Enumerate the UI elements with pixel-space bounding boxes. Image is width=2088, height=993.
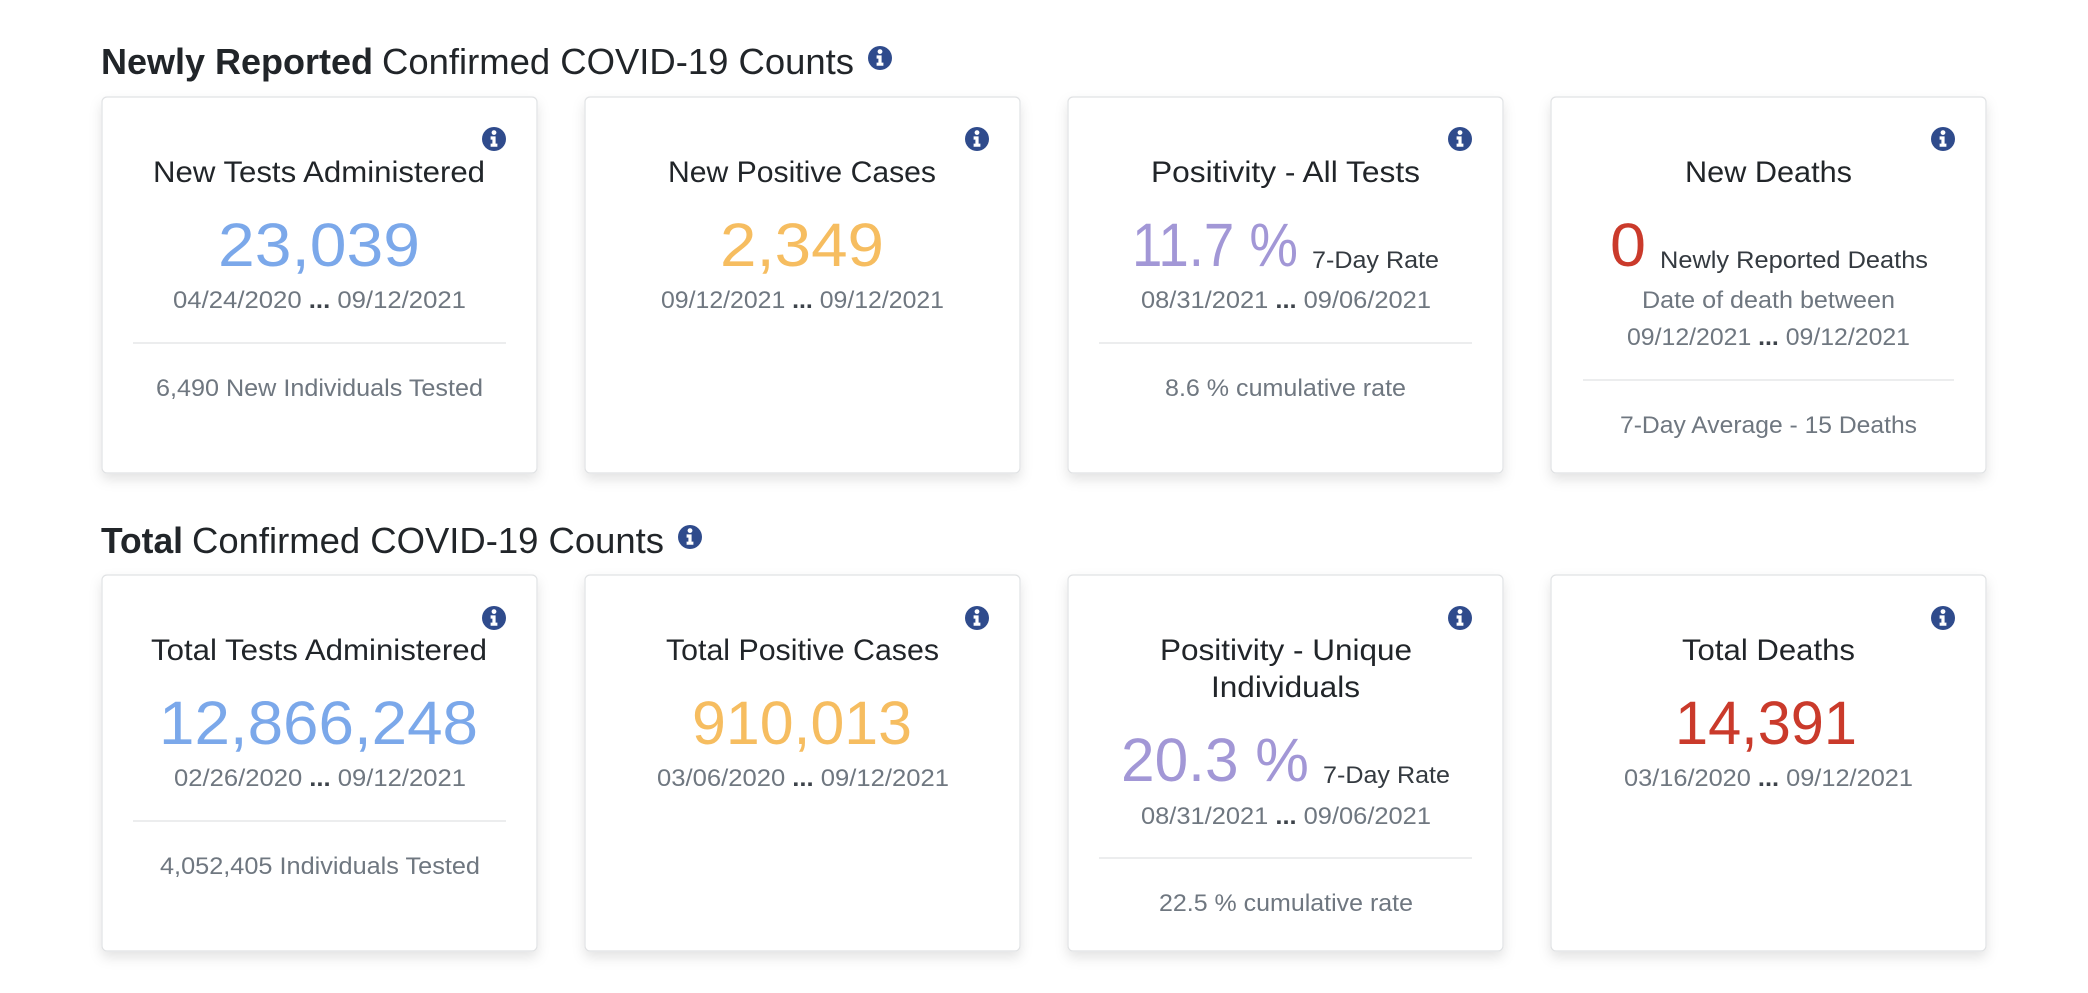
panel: positivity unique individuals: [1068, 575, 1503, 951]
rate label: 7-Day Rate: [1323, 762, 1450, 789]
footnote: 22.5 % cumulative rate: [1159, 890, 1413, 917]
card title: Positivity - All Tests: [1151, 156, 1420, 189]
icon: heading info: [868, 46, 892, 70]
icon: info: [1448, 127, 1472, 151]
panel: new positive cases: [585, 97, 1020, 473]
panel: new deaths: [1551, 97, 1986, 473]
date range: 08/31/2021 ... 09/06/2021: [1141, 803, 1431, 830]
date range: 02/26/2020 ... 09/12/2021: [174, 765, 466, 792]
card title: New Deaths: [1685, 156, 1852, 189]
panel: positivity all tests: [1068, 97, 1503, 473]
value: 0: [1610, 211, 1646, 279]
date range: 03/16/2020 ... 09/12/2021: [1624, 765, 1913, 792]
icon: info: [1931, 606, 1955, 630]
deaths label: Newly Reported Deaths: [1660, 247, 1928, 274]
heading: newly reported: Newly Reported: [101, 41, 373, 82]
card title: New Tests Administered: [153, 156, 485, 189]
footnote: 7-Day Average - 15 Deaths: [1620, 412, 1917, 439]
rate label: 7-Day Rate: [1312, 247, 1439, 274]
icon: info: [1448, 606, 1472, 630]
icon: info: [482, 606, 506, 630]
card title: [1160, 634, 1412, 704]
icon: info: [965, 606, 989, 630]
panel: total positive cases: [585, 575, 1020, 951]
panel: total deaths: [1551, 575, 1986, 951]
card title: Total Deaths: [1682, 634, 1855, 667]
card title: Positivity - Unique: [1160, 634, 1412, 667]
value: 14,391: [1675, 689, 1857, 757]
value: 910,013: [692, 689, 912, 757]
date range: 08/31/2021 ... 09/06/2021: [1141, 287, 1431, 314]
value: 23,039: [218, 211, 420, 279]
footnote: 6,490 New Individuals Tested: [156, 375, 483, 402]
heading: total: Confirmed COVID-19 Counts: [192, 520, 664, 561]
card title: New Positive Cases: [668, 156, 936, 189]
panel: total tests administered: [102, 575, 537, 951]
date note: Date of death between: [1642, 287, 1895, 314]
heading: total: Total: [101, 520, 183, 561]
value: 20.3 %: [1121, 726, 1309, 794]
icon: info: [965, 127, 989, 151]
heading: newly reported: [101, 41, 854, 82]
date range: 09/12/2021 ... 09/12/2021: [1627, 324, 1910, 351]
card title: Individuals: [1211, 671, 1360, 704]
value: 2,349: [720, 211, 884, 279]
date range: 09/12/2021 ... 09/12/2021: [661, 287, 944, 314]
card title: Total Positive Cases: [666, 634, 939, 667]
value: 11.7 %: [1132, 211, 1298, 279]
date range: 04/24/2020 ... 09/12/2021: [173, 287, 466, 314]
footnote: 8.6 % cumulative rate: [1165, 375, 1406, 402]
panel: new tests administered: [102, 97, 537, 473]
heading: newly reported: Confirmed COVID-19 Counts: [382, 41, 854, 82]
value: 12,866,248: [159, 689, 478, 757]
card title: Total Tests Administered: [151, 634, 487, 667]
icon: info: [1931, 127, 1955, 151]
date range: 03/06/2020 ... 09/12/2021: [657, 765, 949, 792]
icon: info: [482, 127, 506, 151]
footnote: 4,052,405 Individuals Tested: [160, 853, 480, 880]
icon: heading info: [678, 525, 702, 549]
